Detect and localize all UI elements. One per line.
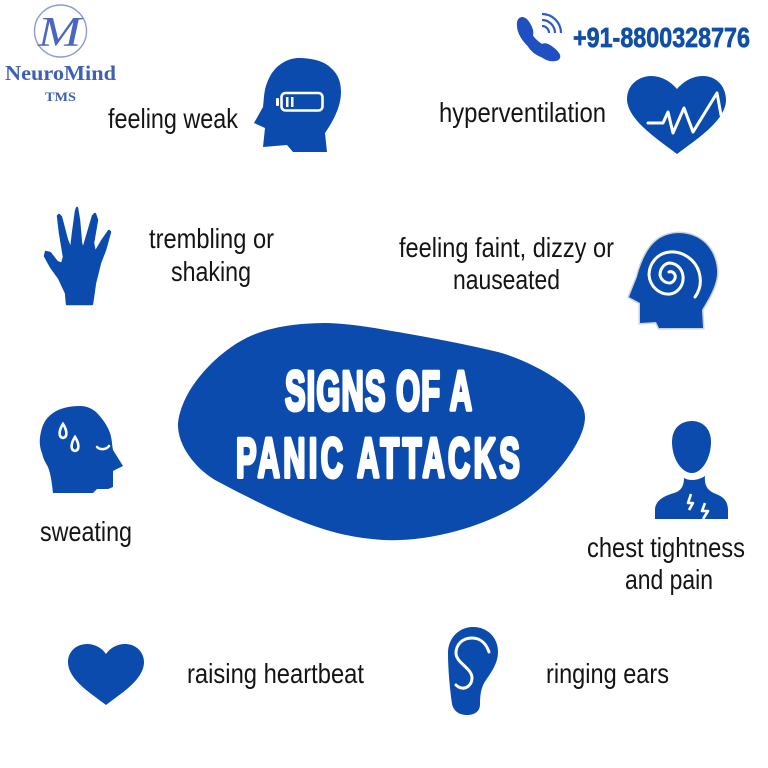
label: chest tightness and pain [587,532,745,595]
icon: head with spiral [629,233,717,328]
title [236,359,520,489]
label: chest tightness and pain: and pain [625,564,713,595]
label: feeling weak: feeling weak [108,103,239,134]
label: trembling or shaking: shaking [171,256,251,287]
label: feeling faint, dizzy or nauseated: feeling faint, dizzy or [399,232,614,263]
icon: person with chest pain [655,421,728,519]
label: sweating: sweating [40,516,132,547]
label: hyperventilation: hyperventilation [439,97,606,128]
title blob [178,323,585,540]
logo: NeuroMind TMS [5,5,116,104]
icon: sweating head [40,406,123,493]
icon: heart [68,644,144,705]
logo emblem: M [37,10,83,56]
icon: head with low battery [254,58,341,152]
label: raising heartbeat: raising heartbeat [187,658,364,689]
label: trembling or shaking [149,223,274,287]
logo subtitle: TMS [45,89,76,104]
icon: phone [518,14,561,60]
label: feeling faint, dizzy or nauseated: nauseated [453,264,560,295]
title: PANIC ATTACKS [236,426,520,489]
logo name: NeuroMind [5,61,116,85]
icon: hand [45,208,110,304]
icon: heart with pulse line [627,76,726,154]
title: SIGNS OF A [285,359,472,422]
icon: ear [448,627,498,715]
label: trembling or shaking: trembling or [149,223,274,254]
label: ringing ears: ringing ears [546,658,669,689]
label: feeling faint, dizzy or nauseated [399,232,614,295]
